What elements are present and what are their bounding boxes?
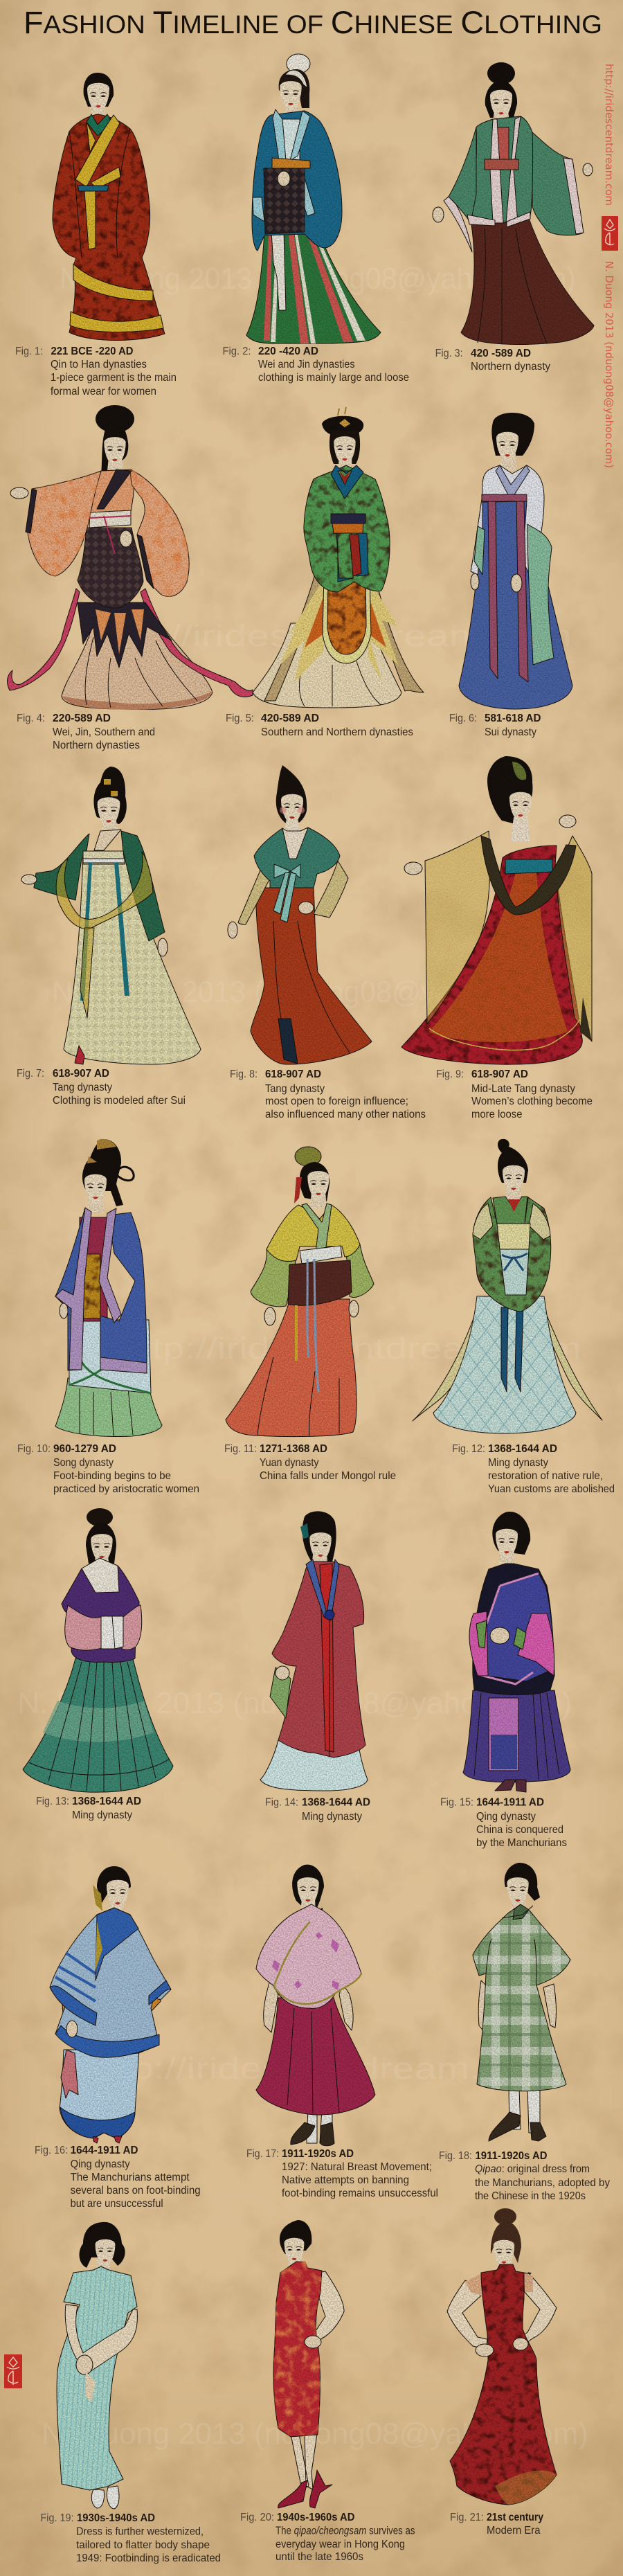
caption [265, 1796, 370, 1823]
watermarks: N. Duong 2013 (nduong08@yahoo.com) [17, 1686, 572, 1720]
caption: 1927: Natural Breast Movement; [282, 2161, 432, 2173]
caption: The qipao/cheongsam survives as [276, 2525, 415, 2537]
caption: Wei, Jin, Southern and [53, 726, 155, 738]
panel: figure 1 [15, 73, 177, 397]
panel: figure 10 [17, 1139, 199, 1495]
caption: Fig. 5: [226, 713, 254, 724]
panel: figure 8 [228, 765, 426, 1120]
illustration: Yuan dynasty dress [226, 1147, 374, 1437]
caption [230, 1068, 426, 1120]
caption: clothing is mainly large and loose [258, 372, 409, 384]
illustration: Song dynasty robe [55, 1139, 162, 1436]
caption: several bans on foot-binding [71, 2185, 201, 2197]
watermarks: http://iridescentdream.com [119, 1332, 581, 1366]
caption: formal wear for women [51, 386, 156, 397]
caption: Qin to Han dynasties [51, 359, 147, 370]
illustration: Tang jacket and red skirt [228, 765, 372, 1064]
caption [17, 713, 155, 751]
caption: tailored to flatter body shape [76, 2539, 210, 2551]
side credit: author: N. Duong 2013 (nduong08@yahoo.com) [603, 261, 615, 468]
illustration: Wei and Jin robe [246, 54, 381, 343]
caption: Tang dynasty [265, 1083, 325, 1095]
panel: figure 16 [35, 1866, 201, 2210]
caption [240, 2512, 415, 2563]
caption [17, 1068, 186, 1107]
caption: Fig. 1: [15, 346, 43, 357]
caption: Fig. 9: [436, 1068, 464, 1080]
caption [40, 2512, 221, 2564]
caption: Women’s clothing become [471, 1095, 593, 1107]
caption: 1368-1644 AD [488, 1443, 557, 1455]
illustration: Ming dress with green robe [413, 1139, 602, 1433]
caption: 221 BCE -220 AD [51, 346, 133, 357]
caption: Fig. 18: [439, 2150, 472, 2162]
caption: most open to foreign influence; [265, 1095, 408, 1107]
caption: Qipao: original dress from [475, 2163, 590, 2175]
panel: figure 21 [447, 2208, 557, 2537]
caption: Fig. 3: [435, 348, 463, 359]
panel: figure 5 [226, 407, 424, 738]
caption: 1930s-1940s AD [77, 2512, 155, 2524]
caption: Fig. 15: [440, 1796, 473, 1809]
panel: figure 7 [17, 767, 201, 1107]
caption: Native attempts on banning [282, 2174, 409, 2186]
caption [440, 1796, 567, 1849]
illustration: Qing jacket and purple skirt [463, 1512, 570, 1792]
caption [436, 1068, 593, 1120]
caption: 1949: Footbinding is eradicated [76, 2552, 221, 2564]
caption: Fig. 17: [246, 2148, 279, 2160]
icon: red seal bottom [4, 2354, 22, 2388]
panel: figure 18 [439, 1863, 610, 2202]
watermarks: N. Duong 2013 (nduong08@yahoo.com) [60, 262, 576, 296]
caption: The Manchurians attempt [71, 2172, 190, 2183]
caption: 960-1279 AD [53, 1443, 116, 1455]
watermarks [17, 262, 588, 2451]
panel: figure 19 [40, 2222, 221, 2564]
caption: Fig. 20: [240, 2512, 274, 2523]
caption: foot-binding remains unsuccessful [282, 2188, 438, 2199]
illustration: Qin to Han robe [53, 73, 165, 341]
caption: Wei and Jin dynasties [258, 359, 354, 370]
caption: restoration of native rule, [488, 1470, 603, 1482]
caption: Qing dynasty [71, 2158, 130, 2170]
caption: Sui dynasty [485, 726, 536, 738]
caption: Fig. 14: [265, 1796, 298, 1809]
caption: 420 -589 AD [471, 348, 531, 359]
caption: 581-618 AD [485, 713, 541, 724]
caption: Southern and Northern dynasties [261, 726, 413, 738]
title: FASHION TIMELINE OF CHINESE CLOTHING [24, 5, 602, 40]
panel: figure 4 [8, 405, 253, 751]
caption: Northern dynasty [471, 361, 550, 373]
caption: Tang dynasty [53, 1082, 112, 1093]
caption: but are unsuccessful [71, 2198, 163, 2210]
icon: red seal top [602, 216, 618, 251]
caption: Fig. 19: [40, 2512, 73, 2524]
caption: Fig. 13: [36, 1796, 69, 1807]
panel: figure 12 [413, 1139, 615, 1495]
caption: 1644-1911 AD [71, 2145, 138, 2156]
illustration: red floral cheongsam [273, 2220, 344, 2508]
panel: figure 9 [401, 756, 593, 1120]
illustration: plaid qipao [473, 1863, 570, 2141]
panel: figure 2 [223, 54, 409, 384]
caption: 618-907 AD [265, 1068, 321, 1080]
caption: 1368-1644 AD [302, 1796, 370, 1809]
illustration: Mid-Late Tang gown with veil [401, 756, 592, 1064]
caption: 1-piece garment is the main [51, 372, 177, 384]
caption: 1271-1368 AD [260, 1443, 327, 1455]
caption: by the Manchurians [476, 1837, 567, 1849]
illustration: Northern dynasty dress [433, 62, 594, 344]
illustration: modern mermaid qipao [447, 2208, 557, 2505]
caption: 618-907 AD [471, 1068, 528, 1080]
caption: Fig. 11: [224, 1443, 257, 1455]
panel: figure 15 [440, 1512, 570, 1849]
caption: Fig. 8: [230, 1068, 258, 1080]
caption: until the late 1960s [276, 2551, 363, 2563]
caption [15, 346, 177, 397]
panel: figure 11 [224, 1147, 396, 1482]
caption: 1911-1920s AD [282, 2148, 354, 2160]
caption: Fig. 10: [17, 1443, 51, 1455]
watermarks: N. Duong 2013 (nduong08@yahoo.com) [52, 975, 572, 1009]
caption: Ming dynasty [302, 1811, 362, 1823]
caption: 1644-1911 AD [476, 1796, 544, 1809]
watermarks: http://iridescentdream.com [90, 619, 572, 653]
side credit: website: http://iridescentdream.com [603, 64, 615, 206]
caption [435, 348, 550, 373]
illustration: Southern and Northern dress [253, 407, 424, 708]
panel: figure 20 [240, 2220, 415, 2563]
caption: Fig. 21: [450, 2512, 484, 2523]
illustration: Ming jacket and green pleated skirt [23, 1508, 173, 1792]
caption [439, 2150, 610, 2202]
caption: Yuan dynasty [260, 1457, 318, 1469]
caption: Northern dynasties [53, 740, 140, 751]
caption: Foot-binding begins to be [53, 1470, 171, 1482]
caption: Mid-Late Tang dynasty [471, 1083, 575, 1095]
illustration: pale teal qipao [57, 2222, 137, 2509]
caption: 1368-1644 AD [72, 1796, 141, 1807]
caption: Dress is further westernized, [76, 2526, 204, 2537]
caption: more loose [471, 1109, 523, 1120]
caption: Fig. 12: [452, 1443, 485, 1455]
caption: 220-589 AD [53, 713, 111, 724]
caption [36, 1796, 141, 1821]
caption: the Manchurians, adopted by [475, 2177, 610, 2189]
caption: also influenced many other nations [265, 1109, 426, 1120]
illustration: Wei Jin dress with ribbons [8, 405, 253, 710]
caption: Ming dynasty [488, 1457, 548, 1469]
caption: Fig. 6: [449, 713, 477, 724]
caption [223, 346, 409, 384]
caption: the Chinese in the 1920s [475, 2190, 586, 2202]
caption: practiced by aristocratic women [53, 1483, 199, 1495]
caption: 1940s-1960s AD [277, 2512, 354, 2523]
watermarks: N. Duong 2013 (nduong08@yahoo.com) [42, 2417, 588, 2451]
caption [17, 1443, 199, 1495]
panel: figure 6 [449, 413, 572, 738]
caption: Ming dynasty [72, 1809, 132, 1821]
caption: Yuan customs are abolished [488, 1483, 615, 1495]
caption [452, 1443, 615, 1495]
caption: China falls under Mongol rule [260, 1470, 396, 1482]
caption [226, 713, 413, 738]
caption [450, 2512, 543, 2537]
caption: China is conquered [476, 1824, 563, 1836]
watermarks: http://iridescentdream.com [87, 2052, 556, 2086]
caption: Clothing is modeled after Sui [53, 1095, 186, 1107]
caption: 21st century [487, 2512, 543, 2523]
caption: 618-907 AD [53, 1068, 109, 1080]
caption: Qing dynasty [476, 1811, 536, 1823]
panel: figure 3 [433, 62, 594, 373]
illustration: pink blouse and crimson skirt [256, 1865, 375, 2146]
caption: Fig. 7: [17, 1068, 44, 1080]
caption: 420-589 AD [261, 713, 319, 724]
illustration: Tang dress with yellow scarf [21, 767, 201, 1064]
caption: Fig. 2: [223, 346, 251, 357]
illustration: Qing blue tunic [50, 1866, 171, 2143]
caption [224, 1443, 396, 1482]
caption [35, 2145, 201, 2210]
caption: 220 -420 AD [258, 346, 318, 357]
caption: Fig. 16: [35, 2145, 68, 2156]
panel: figure 17 [246, 1865, 438, 2199]
illustration: Ming rose coat [260, 1511, 368, 1791]
panel: figure 14 [260, 1511, 370, 1823]
caption: everyday wear in Hong Kong [276, 2539, 405, 2550]
caption: 1911-1920s AD [475, 2150, 547, 2162]
caption: Fig. 4: [17, 713, 45, 724]
caption [449, 713, 541, 738]
caption: Song dynasty [53, 1457, 114, 1469]
illustration: Sui dynasty dress [459, 413, 572, 709]
panel: figure 13 [23, 1508, 173, 1821]
caption: Modern Era [487, 2525, 541, 2537]
caption [246, 2148, 438, 2199]
